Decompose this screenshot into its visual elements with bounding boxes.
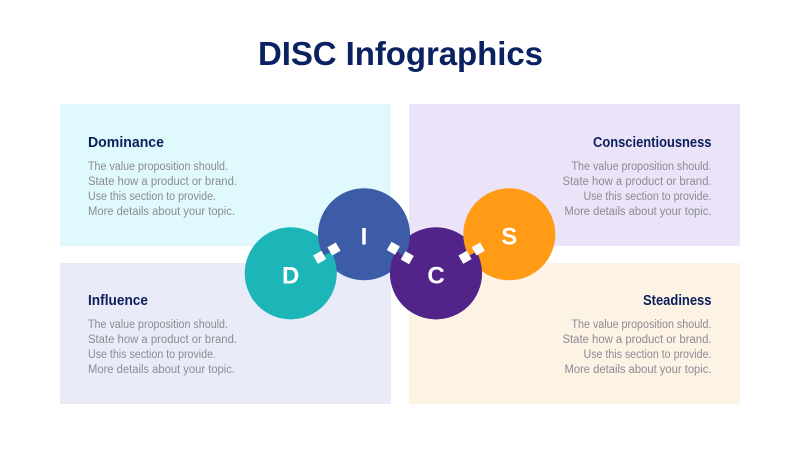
chain of interlocked DISC circles xyxy=(245,188,555,319)
text block: Steadiness description: More details about your topic. xyxy=(564,364,712,376)
panel: Influence xyxy=(60,263,391,404)
panel: Dominance xyxy=(60,104,391,246)
title: DISC Infographics xyxy=(258,35,543,72)
text block: Dominance description: More details about your topic. xyxy=(88,206,235,218)
letter D: D xyxy=(282,262,299,290)
text block: Influence description: More details about your topic. xyxy=(88,364,235,376)
heading: Dominance: Dominance xyxy=(88,135,164,151)
letter I: I xyxy=(361,224,367,250)
link squares xyxy=(313,242,485,264)
text block: Conscientiousness description: The value proposition should. xyxy=(572,161,712,173)
text block: Dominance description: State how a product or brand. xyxy=(88,176,237,188)
panel: Steadiness xyxy=(409,263,740,404)
panel: Conscientiousness xyxy=(409,104,740,246)
text block: Dominance description: Use this section to provide. xyxy=(88,191,216,203)
text block: Influence description xyxy=(88,319,237,376)
text block: Influence description: Use this section to provide. xyxy=(88,349,216,361)
text block: Steadiness description: State how a product or brand. xyxy=(562,334,712,346)
heading: Influence: Influence xyxy=(88,293,148,309)
heading: Conscientiousness: Conscientiousness xyxy=(593,135,712,151)
letter C: C xyxy=(427,262,445,290)
text block: Conscientiousness description xyxy=(562,161,712,218)
text block: Influence description: State how a product or brand. xyxy=(88,334,237,346)
text block: Dominance description: The value proposition should. xyxy=(88,161,228,173)
heading: Steadiness: Steadiness xyxy=(643,293,712,309)
text block: Conscientiousness description: State how a product or brand. xyxy=(562,176,712,188)
text block: Dominance description xyxy=(88,161,237,218)
letter S: S xyxy=(501,224,517,250)
text block: Conscientiousness description: More details about your topic. xyxy=(564,206,712,218)
text block: Influence description: The value proposition should. xyxy=(88,319,228,331)
text block: Conscientiousness description: Use this section to provide. xyxy=(584,191,712,203)
text block: Steadiness description xyxy=(562,319,712,376)
text block: Steadiness description: Use this section to provide. xyxy=(584,349,712,361)
text block: Steadiness description: The value proposition should. xyxy=(572,319,712,331)
